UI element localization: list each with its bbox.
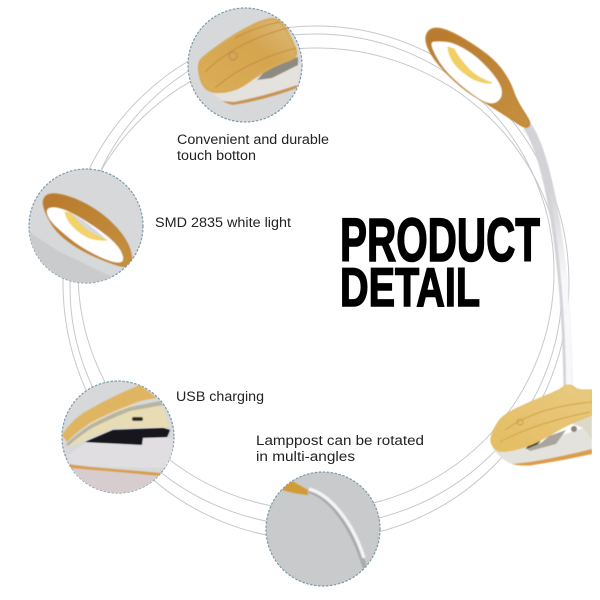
label: USB charging: USB charging [176, 389, 264, 404]
lamp stem [527, 126, 569, 388]
label: touch button [177, 132, 329, 163]
title: DETAIL [340, 256, 480, 318]
label: lamppost: in multi-angles [256, 449, 355, 464]
product photo: desk lamp [426, 28, 592, 466]
detail circle: white light [29, 169, 143, 283]
detail circle: rotating lamppost [266, 472, 380, 586]
label: lamppost [256, 433, 424, 464]
connecting rings [63, 26, 569, 540]
lamp clip base [491, 385, 592, 466]
detail circle: touch button [188, 8, 302, 122]
label: white light: SMD 2835 white light [155, 215, 291, 230]
detail circle: USB port [62, 381, 176, 494]
label: lamppost: Lamppost can be rotated [256, 433, 424, 448]
label: touch button: touch botton [177, 148, 256, 163]
title [340, 206, 540, 318]
lamp head [426, 28, 530, 127]
label: touch button: Convenient and durable [177, 132, 329, 147]
